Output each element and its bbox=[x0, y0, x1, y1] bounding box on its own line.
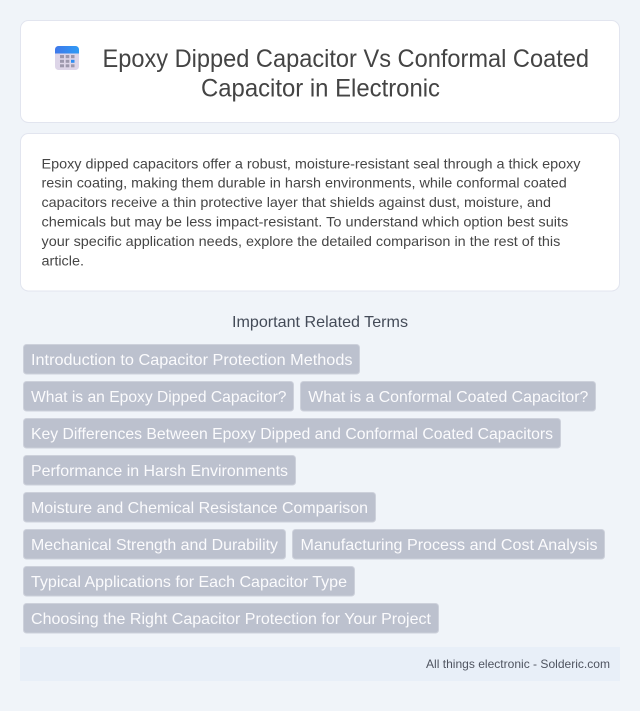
tag: key differences: Key Differences Between Epoxy Dipped and Conformal Coated Capacitors bbox=[31, 426, 553, 443]
tag: conformal coated bbox=[300, 382, 596, 411]
summary paragraph: your specific application needs, explore the detailed comparison in the rest of this bbox=[42, 233, 560, 249]
summary paragraph: Epoxy dipped capacitors offer a robust, moisture-resistant seal through a thick epoxy bbox=[42, 155, 580, 171]
icon: calendar bbox=[55, 46, 79, 70]
tag: harsh environments bbox=[24, 456, 296, 485]
tag: manufacturing bbox=[292, 530, 604, 559]
tag: mechanical strength bbox=[24, 530, 286, 559]
heading: Epoxy Dipped Capacitor Vs Conformal Coated bbox=[102, 45, 589, 73]
summary paragraph bbox=[42, 155, 580, 268]
footer: All things electronic - Solderic.com bbox=[426, 657, 610, 671]
summary paragraph: article. bbox=[42, 252, 84, 268]
summary paragraph: chemicals but may be less impact-resistant. To understand which option best suits bbox=[42, 214, 568, 230]
tag: epoxy dipped: What is an Epoxy Dipped Capacitor? bbox=[31, 389, 287, 406]
tag: typical applications bbox=[24, 566, 354, 596]
tag: introduction bbox=[24, 344, 360, 374]
panel: title card bbox=[20, 20, 620, 122]
heading: Capacitor in Electronic bbox=[201, 74, 440, 102]
tag: epoxy dipped bbox=[24, 382, 294, 411]
tag: typical applications: Typical Applications for Each Capacitor Type bbox=[31, 574, 347, 591]
tag list bbox=[24, 344, 604, 633]
tag: moisture and chemical: Moisture and Chemical Resistance Comparison bbox=[31, 500, 368, 517]
heading bbox=[102, 45, 589, 102]
tag: choosing protection bbox=[24, 604, 438, 633]
summary paragraph: resin coating, making them durable in harsh environments, while conformal coated bbox=[42, 175, 567, 191]
footer bbox=[20, 647, 620, 681]
tag: key differences bbox=[24, 418, 560, 448]
tag: conformal coated: What is a Conformal Coated Capacitor? bbox=[308, 389, 588, 406]
tag: mechanical strength: Mechanical Strength and Durability bbox=[31, 537, 278, 554]
tag: moisture and chemical bbox=[24, 492, 376, 522]
tag: introduction: Introduction to Capacitor Protection Methods bbox=[31, 352, 352, 369]
heading: important related terms: Important Related Terms bbox=[232, 314, 408, 331]
summary paragraph: capacitors receive a thin protective layer that shields against dust, moisture, and bbox=[42, 194, 551, 210]
tag: manufacturing: Manufacturing Process and Cost Analysis bbox=[300, 537, 598, 554]
tag: harsh environments: Performance in Harsh Environments bbox=[31, 463, 288, 480]
panel: summary text bbox=[20, 134, 620, 291]
tag: choosing protection: Choosing the Right Capacitor Protection for Your Project bbox=[31, 611, 432, 628]
